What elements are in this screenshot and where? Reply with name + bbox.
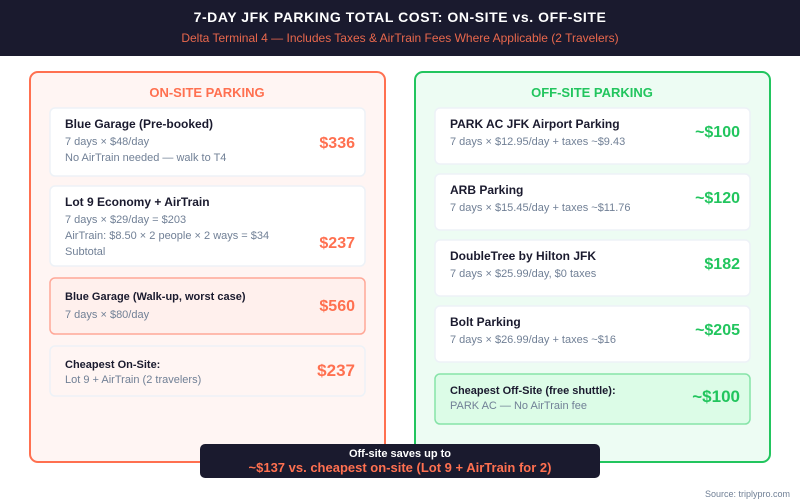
subtitle: Delta Terminal 4 — Includes Taxes & AirTrain Fees Where Applicable (2 Travelers) (181, 31, 619, 45)
card: cheapest off-site: PARK AC — No AirTrain fee (450, 400, 587, 412)
card: cheapest on-site: $237 (317, 361, 355, 380)
card: park ac (435, 108, 750, 164)
card: blue garage pre-booked (50, 108, 365, 176)
card: doubletree: $182 (704, 256, 740, 273)
card: blue garage walk-up (50, 278, 365, 334)
callout: savings: ~$137 vs. cheapest on-site (Lot 9 + AirTrain for 2) (249, 460, 551, 475)
source note: Source: triplypro.com (705, 489, 790, 499)
card: lot 9 economy: $237 (319, 235, 355, 252)
card: blue garage pre-booked: Blue Garage (Pre-booked) (65, 117, 213, 131)
panel: off-site parking (415, 72, 770, 462)
card: park ac: 7 days × $12.95/day + taxes ~$9.43 (450, 136, 625, 148)
card: bolt parking: Bolt Parking (450, 315, 521, 329)
card: arb parking: ~$120 (695, 190, 740, 207)
card: bolt parking: ~$205 (695, 322, 740, 339)
heading: on-site: ON-SITE PARKING (149, 85, 265, 100)
card: blue garage pre-booked: No AirTrain needed — walk to T4 (65, 152, 226, 164)
card: blue garage walk-up: 7 days × $80/day (65, 309, 150, 321)
card: cheapest off-site: ~$100 (692, 387, 740, 406)
card: cheapest off-site: Cheapest Off-Site (free shuttle): (450, 385, 616, 397)
card: cheapest on-site: Lot 9 + AirTrain (2 travelers) (65, 374, 201, 386)
card: park ac: ~$100 (695, 124, 740, 141)
card: lot 9 economy: Subtotal (65, 246, 105, 258)
heading: off-site: OFF-SITE PARKING (531, 85, 653, 100)
card: park ac: PARK AC JFK Airport Parking (450, 117, 620, 131)
card: arb parking (435, 174, 750, 230)
card: lot 9 economy (50, 186, 365, 266)
card: blue garage walk-up: Blue Garage (Walk-up, worst case) (65, 291, 246, 303)
card: doubletree: DoubleTree by Hilton JFK (450, 249, 596, 263)
card: arb parking: 7 days × $15.45/day + taxes ~$11.76 (450, 202, 631, 214)
card: blue garage pre-booked: $336 (319, 135, 355, 152)
card: cheapest on-site: Cheapest On-Site: (65, 359, 160, 371)
panel: on-site parking (30, 72, 385, 462)
card: doubletree (435, 240, 750, 296)
callout: savings (200, 444, 600, 478)
card: arb parking: ARB Parking (450, 183, 523, 197)
card: doubletree: 7 days × $25.99/day, $0 taxes (450, 268, 597, 280)
header band (0, 0, 800, 56)
card: bolt parking (435, 306, 750, 362)
card: lot 9 economy: 7 days × $29/day = $203 (65, 214, 186, 226)
card: cheapest on-site (50, 346, 365, 396)
card: lot 9 economy: Lot 9 Economy + AirTrain (65, 195, 210, 209)
title: 7-DAY JFK PARKING TOTAL COST: ON-SITE vs. OFF-SITE (194, 9, 606, 25)
card: blue garage pre-booked: 7 days × $48/day (65, 136, 150, 148)
card: blue garage walk-up: $560 (319, 298, 355, 315)
callout: savings: Off-site saves up to (349, 448, 451, 460)
card: bolt parking: 7 days × $26.99/day + taxes ~$16 (450, 334, 616, 346)
card: lot 9 economy: AirTrain: $8.50 × 2 people × 2 ways = $34 (65, 230, 269, 242)
card: cheapest off-site (435, 374, 750, 424)
